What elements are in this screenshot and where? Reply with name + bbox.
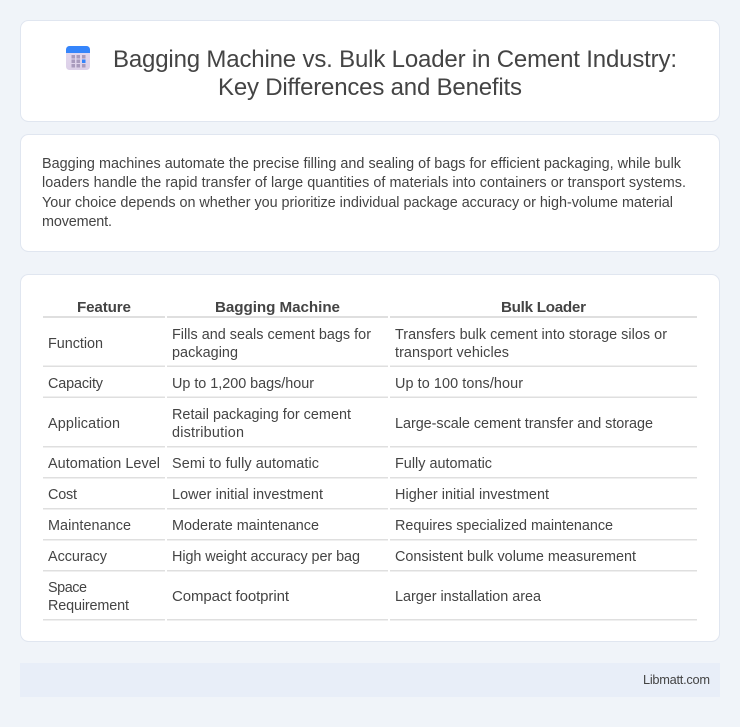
row: capacity: Up to 1,200 bags/hour bbox=[172, 376, 314, 392]
panel: introduction bbox=[20, 134, 720, 252]
row: maintenance bbox=[48, 518, 613, 534]
row: application: Large-scale cement transfer and storage bbox=[395, 416, 653, 432]
row: cost: Lower initial investment bbox=[172, 487, 323, 503]
row: automation level bbox=[48, 456, 492, 472]
row: cost: Cost bbox=[48, 487, 77, 503]
row: application: Application bbox=[48, 416, 120, 432]
title bbox=[113, 46, 677, 101]
text block: introduction: Your choice depends on whether you prioritize individual package accuracy or high-volume material bbox=[42, 195, 673, 211]
row: capacity: Up to 100 tons/hour bbox=[395, 376, 523, 392]
row: maintenance: Maintenance bbox=[48, 518, 131, 534]
row: maintenance: Requires specialized maintenance bbox=[395, 518, 613, 534]
row: space requirement: Space bbox=[48, 580, 87, 596]
row: capacity bbox=[48, 376, 523, 392]
row: space requirement: Requirement bbox=[48, 598, 129, 614]
row: application bbox=[48, 407, 653, 441]
row: accuracy: Accuracy bbox=[48, 549, 108, 565]
panel: comparison table bbox=[20, 274, 720, 642]
row: automation level: Automation Level bbox=[48, 456, 160, 472]
row: function: Function bbox=[48, 336, 103, 352]
title: Bagging Machine vs. Bulk Loader in Cement Industry: bbox=[113, 46, 677, 73]
row: space requirement bbox=[48, 580, 541, 614]
text block: introduction: movement. bbox=[42, 214, 112, 230]
row: function bbox=[48, 327, 667, 361]
table header: Bagging Machine bbox=[215, 299, 340, 316]
row: accuracy bbox=[48, 549, 636, 565]
row: application: distribution bbox=[172, 425, 244, 441]
row: capacity: Capacity bbox=[48, 376, 104, 392]
row: space requirement: Compact footprint bbox=[172, 588, 290, 605]
table header: Bulk Loader bbox=[501, 299, 586, 316]
row: function: transport vehicles bbox=[395, 345, 509, 361]
row: automation level: Semi to fully automatic bbox=[172, 456, 319, 472]
row: function: packaging bbox=[172, 345, 238, 361]
row: application: Retail packaging for cement bbox=[172, 407, 351, 423]
text block: introduction: loaders handle the rapid transfer of large quantities of materials into containers or transport systems. bbox=[42, 175, 686, 191]
row: maintenance: Moderate maintenance bbox=[172, 518, 319, 534]
footer: Libmatt.com bbox=[643, 672, 710, 687]
row: function: Transfers bulk cement into storage silos or bbox=[395, 327, 667, 343]
footer bbox=[20, 663, 720, 697]
row: accuracy: High weight accuracy per bag bbox=[172, 549, 360, 565]
row: automation level: Fully automatic bbox=[395, 456, 492, 472]
icon: calendar bbox=[66, 46, 90, 70]
table header bbox=[77, 299, 586, 316]
row: space requirement: Larger installation area bbox=[395, 589, 541, 605]
panel: header bbox=[20, 20, 720, 122]
text block: introduction bbox=[42, 156, 686, 230]
text block: introduction: Bagging machines automate the precise filling and sealing of bags for efficient packaging, while bulk bbox=[42, 156, 682, 172]
row: function: Fills and seals cement bags for bbox=[172, 327, 371, 343]
title: Key Differences and Benefits bbox=[218, 74, 522, 101]
row: cost: Higher initial investment bbox=[395, 487, 549, 503]
row: accuracy: Consistent bulk volume measurement bbox=[395, 549, 636, 565]
table header: Feature bbox=[77, 299, 131, 316]
row: cost bbox=[48, 487, 549, 503]
